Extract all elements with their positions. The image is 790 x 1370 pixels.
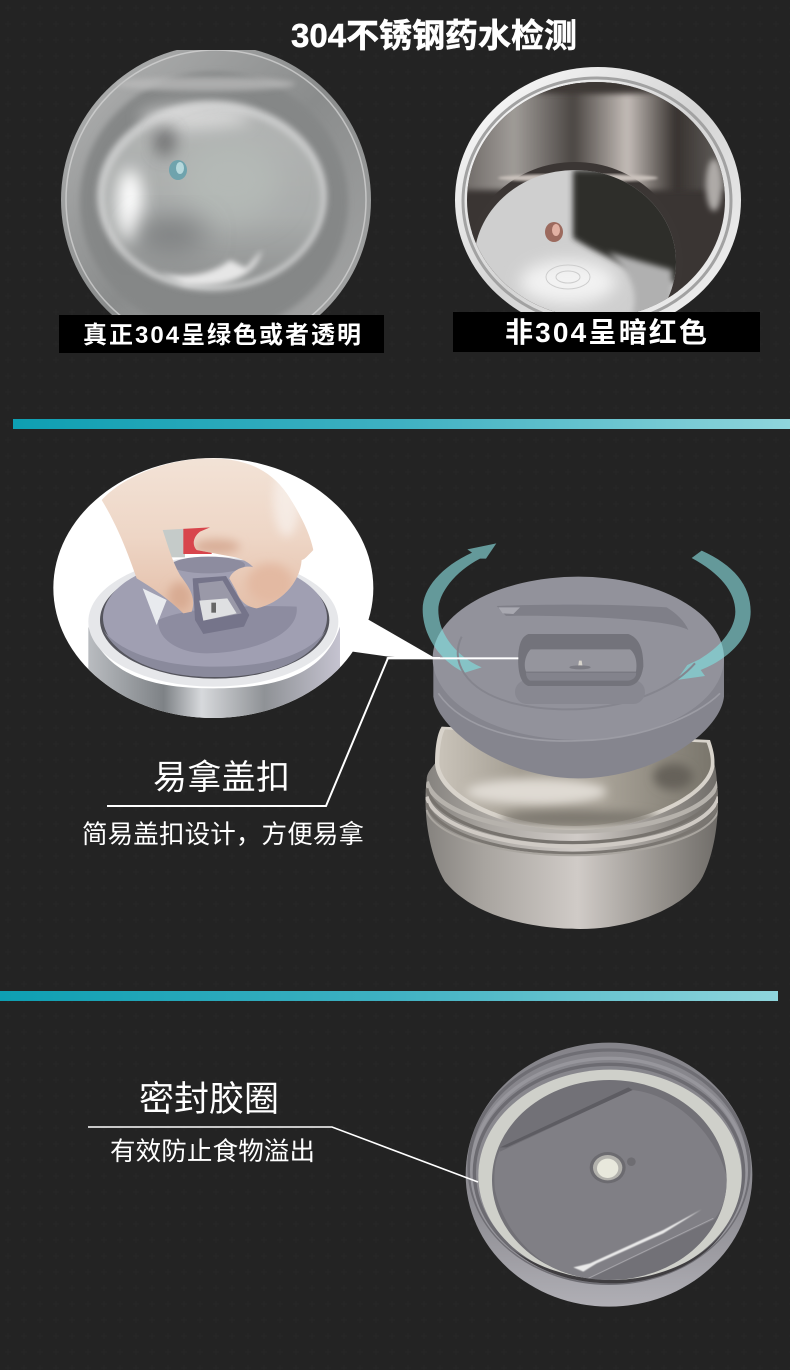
label: real 304 result: 真正304呈绿色或者透明 [83, 322, 361, 349]
divider bar 2 [0, 991, 778, 1001]
photo bubble: hand opening lid [53, 450, 437, 720]
center valve [590, 1152, 626, 1183]
rotation arrows and lid over can [387, 543, 751, 929]
hand [102, 458, 314, 614]
leader line: easy-grip lid [107, 658, 440, 806]
lid inner panel [492, 1080, 727, 1280]
lid rim highlight [438, 693, 720, 741]
label: non-304 result: 非304呈暗红色 [505, 317, 707, 348]
lid raised grip ridge [497, 605, 688, 630]
photo: lid underside with seal [466, 1043, 752, 1307]
pointer line to handle [387, 657, 518, 659]
title: 304不锈钢药水检测 [291, 17, 577, 54]
photo: real 304 steel bowl with green drop [61, 50, 371, 315]
heading: sealing ring: 密封胶圈 [139, 1080, 279, 1119]
can threads [427, 782, 719, 855]
leader line: sealing ring [88, 1127, 478, 1182]
lid handle recess [515, 680, 645, 704]
thread ridges [469, 1050, 749, 1283]
can body [426, 763, 718, 929]
arrow: right [677, 551, 751, 680]
arrow: left [423, 543, 496, 673]
heading: easy-grip lid: 易拿盖扣 [153, 759, 290, 797]
divider bar 1 [13, 419, 790, 429]
label: real 304 result [59, 315, 384, 353]
bubble tail [340, 617, 437, 659]
caption: easy-grip lid: 简易盖扣设计，方便易拿 [82, 821, 364, 849]
label: non-304 result [453, 312, 760, 352]
caption: sealing ring: 有效防止食物溢出 [110, 1138, 315, 1166]
can interior [435, 727, 714, 830]
sealing ring [478, 1070, 742, 1282]
photo: non-304 steel bowl with red drop [455, 67, 741, 312]
lid side [433, 658, 724, 778]
arrow overlap on lid [434, 629, 724, 680]
lid top [433, 577, 724, 740]
